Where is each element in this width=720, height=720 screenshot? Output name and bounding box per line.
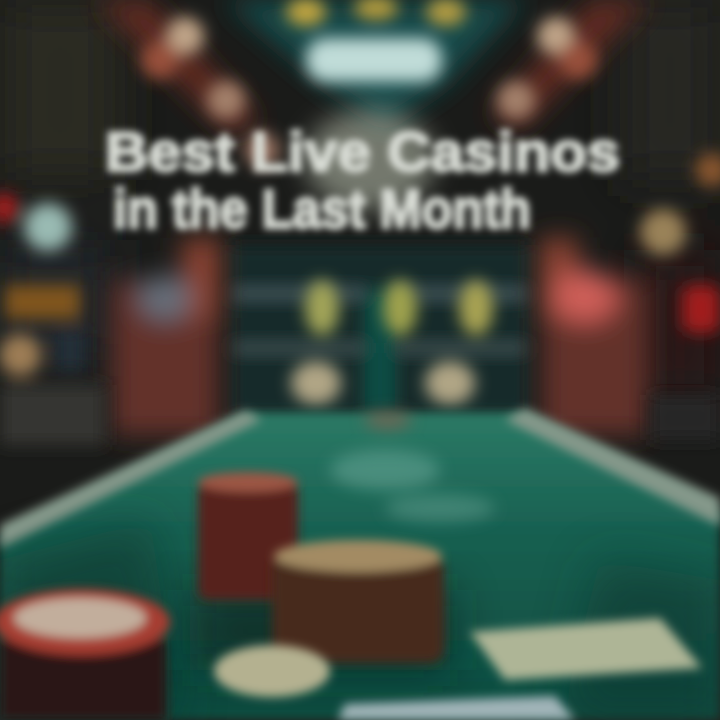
table felt [0, 412, 720, 720]
centre cabinet [230, 245, 530, 415]
right strip bulbs [497, 17, 597, 119]
table rim left [0, 410, 262, 548]
table markings [330, 411, 495, 522]
chip stack: red [198, 472, 298, 600]
title [105, 120, 620, 240]
title backlight [305, 110, 435, 210]
left light strip [95, 0, 260, 135]
card bottom [338, 696, 575, 720]
left wall lights [0, 193, 105, 445]
card centre [214, 645, 330, 697]
cabinet lights [291, 280, 493, 405]
card right [470, 618, 702, 680]
title: in the Last Month [113, 177, 531, 240]
right red panel [540, 238, 648, 435]
wall shading [0, 0, 720, 400]
left red panel [112, 238, 220, 435]
right wall lights [640, 153, 720, 440]
top ceiling: teal sign [225, 0, 525, 125]
table rim right [505, 408, 720, 526]
sign lights [286, 0, 466, 82]
chip stack shadow [190, 590, 450, 670]
felt edge shading [0, 520, 720, 720]
title: Best Live Casinos [105, 120, 620, 183]
left strip bulbs [141, 17, 280, 168]
chip stack: white and red [0, 589, 170, 720]
right light strip [490, 0, 650, 130]
chip stack: brown [272, 540, 444, 663]
